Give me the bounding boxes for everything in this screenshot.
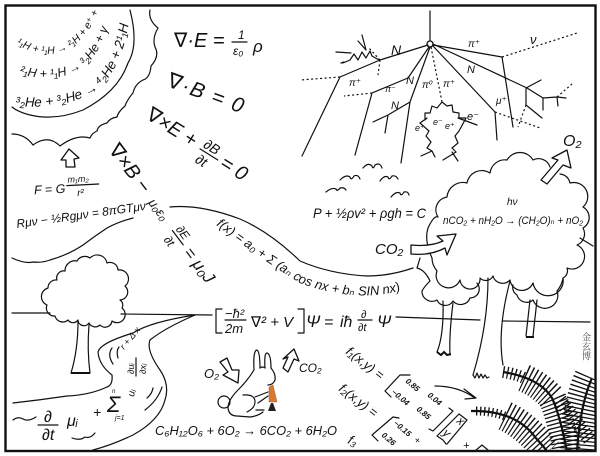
- Maxwell equation: curl E: ∂t: [193, 151, 211, 171]
- particle labels: e⁻: [467, 111, 479, 123]
- CO2 label rabbit: CO₂: [299, 361, 322, 375]
- fractal system equations: f₃: [346, 432, 360, 449]
- icon: CO2 arrow out of rabbit: [283, 349, 299, 372]
- particle shower: [300, 11, 577, 163]
- tree left: [41, 255, 129, 373]
- particle labels: e⁺: [445, 121, 455, 131]
- O2 label rabbit: O₂: [204, 366, 219, 381]
- Maxwell equation: curl B: ∂t: [161, 233, 178, 250]
- Schrodinger equation: Ψ: [306, 312, 321, 331]
- Maxwell equation: div E: ∇·E =: [173, 30, 225, 52]
- river equation: μᵢ: [66, 413, 79, 430]
- icon: up arrow to sun: [61, 149, 79, 167]
- Maxwell equation: div E: 1: [238, 28, 245, 42]
- tree right with canopy: [417, 152, 593, 378]
- river equation: n: [112, 389, 116, 395]
- Maxwell equation: curl E: [137, 101, 254, 192]
- horizon line left: [12, 313, 212, 315]
- particle labels: e⁺: [415, 123, 425, 133]
- fractal system equations: 0.85: [404, 377, 422, 394]
- respiration equation: C₆H₁₂O₆ + 6O₂ → 6CO₂ + 6H₂O: [155, 423, 337, 438]
- Maxwell equation: curl E: ∂B: [201, 136, 223, 158]
- fractal system equations: [336, 344, 488, 452]
- Fourier series: f(x) = a₀ + Σ (aₙ cos nx + bₙ SIN nx): [216, 219, 400, 296]
- panel: sun with fusion reactions: [11, 9, 159, 147]
- Schrodinger equation: 2m: [224, 321, 243, 336]
- particle labels: ν: [530, 32, 537, 47]
- fractal system equations: x: [453, 413, 468, 429]
- Maxwell equation: curl B: [97, 139, 222, 291]
- fractal system equations: −0.04: [390, 388, 411, 408]
- particle labels: N: [391, 42, 402, 58]
- river: [13, 315, 195, 450]
- Schrodinger equation: iħ: [340, 314, 353, 331]
- particle labels: π⁺: [349, 78, 361, 89]
- hills: [12, 206, 413, 276]
- particle labels: π⁻: [385, 84, 396, 94]
- gravity equation: r²: [77, 188, 85, 199]
- particle labels: π⁰: [422, 80, 433, 91]
- birds: [326, 164, 409, 197]
- fractal system equations: 0.85: [415, 405, 433, 422]
- river equation: ∂t: [42, 427, 55, 444]
- Maxwell equation: curl E: ∇×E +: [142, 103, 201, 152]
- river equation: ∂xⱼ: [138, 363, 148, 374]
- gravity equation: F = G: [34, 182, 66, 197]
- river equation: ∂uᵢ: [126, 363, 136, 374]
- particle labels: e⁻: [433, 117, 443, 127]
- Maxwell equation: curl E: = 0: [216, 152, 252, 186]
- Schrodinger equation: Ψ: [377, 312, 392, 331]
- particle labels: [349, 32, 537, 133]
- gravity equation: [33, 173, 99, 201]
- particle labels: π⁺: [468, 39, 480, 50]
- arrow to fern: [435, 386, 476, 399]
- ferns: [471, 372, 592, 452]
- horizon line right: [396, 317, 590, 322]
- river equation: r + Δ x: [118, 325, 143, 351]
- Schrodinger equation: −ħ²: [225, 306, 245, 321]
- fractal system equations: +: [411, 435, 423, 447]
- particle labels: N: [391, 100, 399, 112]
- river equation: uⱼ: [126, 388, 138, 398]
- particle labels: π⁺: [443, 79, 455, 90]
- particle labels: N: [406, 75, 414, 87]
- Maxwell equation: curl B: ∂E: [173, 223, 193, 243]
- particle labels: μ⁺: [495, 96, 507, 107]
- O2 label tree: O₂: [563, 133, 582, 150]
- river equation: Σ: [106, 392, 121, 417]
- river equation: [38, 325, 148, 444]
- photosynthesis equation: [443, 197, 584, 227]
- Schrodinger equation: ∇² + V: [250, 314, 295, 331]
- Maxwell equation: curl B: ∇×B −: [103, 139, 155, 197]
- Schrodinger equation: [216, 306, 392, 336]
- fractal system equations: f₁(x,y) =: [343, 344, 388, 383]
- signature: 金玄博: [580, 331, 591, 361]
- fractal system equations: 0.26: [380, 431, 398, 448]
- gravity equation: m₁m₂: [67, 173, 90, 185]
- fractal system equations: −0.15: [392, 419, 413, 439]
- icon: rabbit with carrot: [218, 350, 277, 417]
- Maxwell equation: curl B: = μ₀J: [180, 244, 219, 287]
- fractal system equations: y: [439, 425, 454, 441]
- Maxwell equation: div E: ε₀: [233, 44, 243, 58]
- icon: O2 arrow into rabbit: [220, 358, 239, 383]
- Schrodinger equation: ∂: [361, 309, 367, 321]
- Maxwell equation: div B: ∇·B = 0: [163, 69, 248, 118]
- river equation: ∂: [44, 409, 52, 426]
- fusion equation 2: ²₁H + ¹₁H → ³₂He + γ: [20, 25, 110, 79]
- Maxwell equation: curl B: μ₀ε₀: [145, 195, 172, 224]
- river equation: +: [93, 404, 101, 420]
- fractal system equations: f₂(x,y) =: [336, 381, 381, 420]
- fractal system equations: +: [463, 440, 470, 452]
- Maxwell equation: div E: [173, 28, 263, 58]
- photosynthesis equation: hν: [507, 197, 518, 208]
- Bernoulli equation: P + ½ρv² + ρgh = C: [313, 205, 427, 221]
- Maxwell equation: div E: ρ: [252, 37, 263, 56]
- icon: O2 arrow leaving tree: [541, 150, 571, 184]
- photosynthesis equation: nCO₂ + nH₂O → (CH₂O)ₙ + nO₂: [443, 215, 584, 227]
- river equation: j=1: [114, 415, 125, 422]
- Einstein field equation: Rμν − ½Rgμν = 8πGTμν: [15, 199, 147, 231]
- Schrodinger equation: ∂t: [358, 322, 367, 334]
- fusion equation 3: ³₂He + ³₂He → ⁴₂He + 2¹₁H: [16, 22, 128, 108]
- fractal system equations: 0.04: [426, 391, 444, 408]
- CO2 label tree: CO₂: [375, 241, 404, 258]
- Schrodinger equation: =: [324, 314, 333, 331]
- icon: CO2 arrow into tree: [411, 234, 456, 255]
- particle labels: N: [467, 64, 475, 76]
